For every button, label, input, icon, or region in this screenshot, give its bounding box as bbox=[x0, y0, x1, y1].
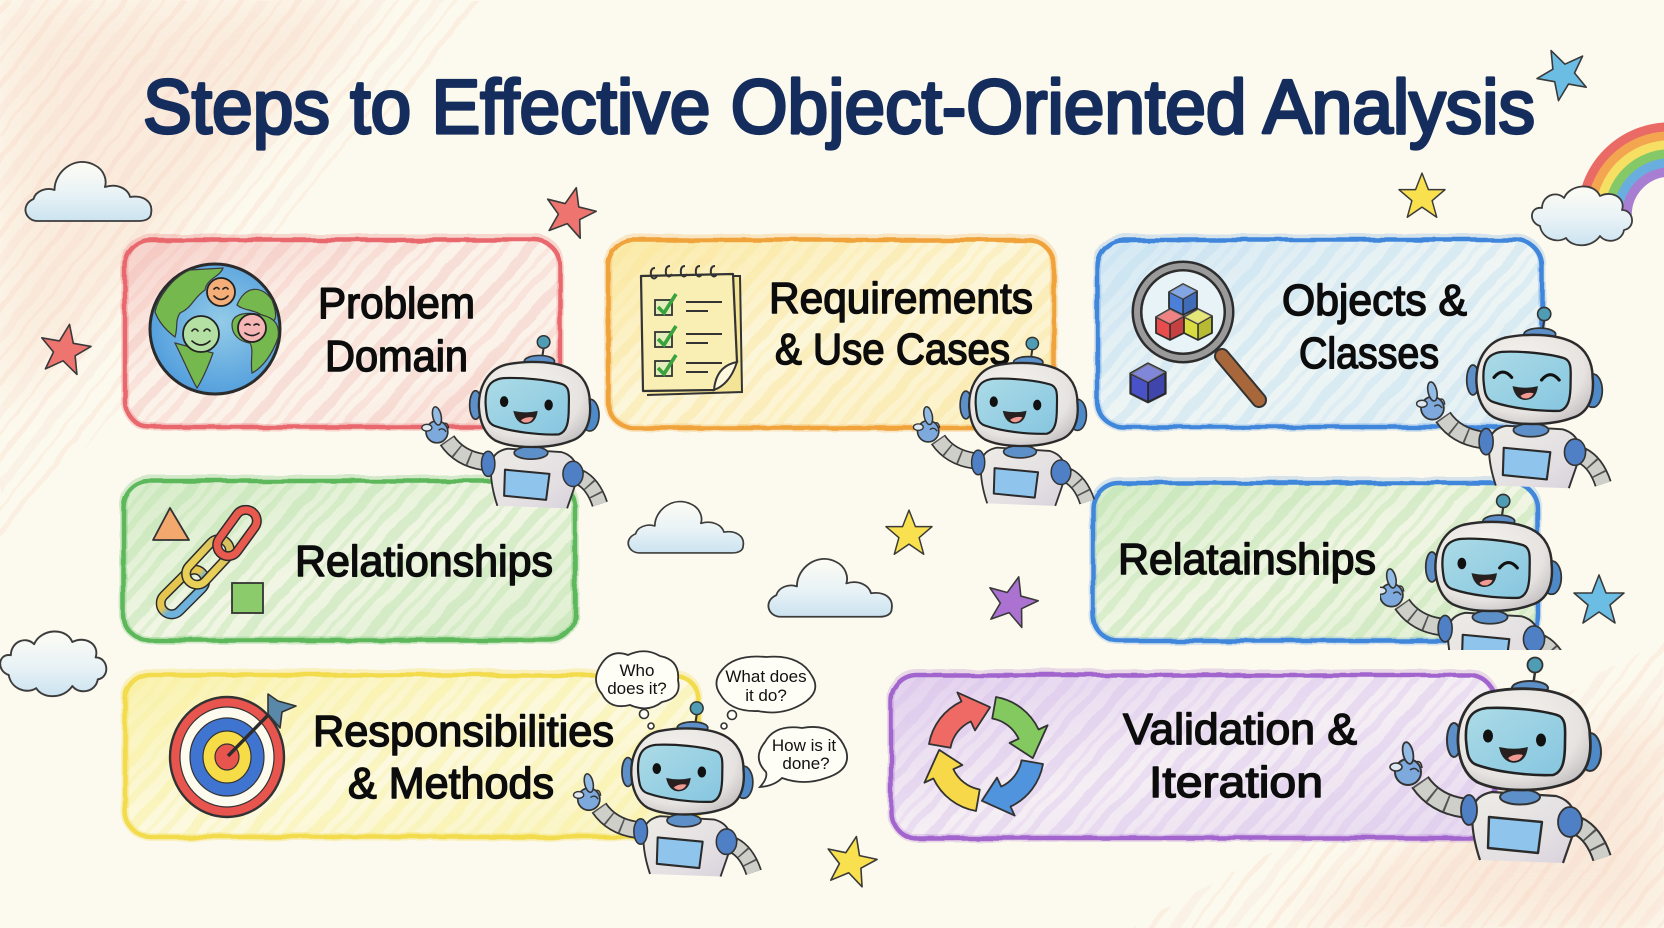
heading: objects and classes: Objects & bbox=[1282, 276, 1467, 325]
panel box bbox=[608, 238, 1054, 428]
cloud: left edge bbox=[0, 631, 106, 696]
heading: responsibilities and methods: & Methods bbox=[348, 759, 554, 808]
heading: problem domain: Domain bbox=[325, 332, 468, 381]
speech bubble: what does it do bbox=[716, 657, 815, 729]
icon: cycle arrows bbox=[924, 692, 1048, 816]
panel box bbox=[891, 673, 1495, 838]
speech bubble: how is it done bbox=[759, 727, 847, 787]
robot: validation bbox=[1390, 658, 1602, 863]
heading: problem domain bbox=[318, 279, 475, 381]
panel: requirements and use cases bbox=[608, 238, 1054, 428]
star: purple centre bbox=[982, 570, 1043, 630]
heading: validation and iteration: Iteration bbox=[1149, 758, 1323, 807]
heading: requirements and use cases bbox=[769, 274, 1033, 374]
background pencil hatching: bottom-right corner bbox=[1130, 640, 1664, 928]
panel: relationships (blue outline) bbox=[1093, 481, 1538, 641]
cloud: centre lower bbox=[768, 559, 892, 617]
cloud: centre upper bbox=[628, 502, 743, 553]
speech bubble: who does it: Who bbox=[620, 661, 654, 680]
panel box bbox=[125, 238, 560, 427]
panel box bbox=[125, 673, 699, 837]
icon: target with arrow bbox=[170, 694, 296, 817]
heading: requirements and use cases: & Use Cases bbox=[775, 325, 1010, 374]
star: red upper bbox=[540, 182, 601, 240]
panel: relationships (green) bbox=[123, 479, 575, 640]
speech bubble: who does it: does it? bbox=[607, 679, 667, 698]
panel: responsibilities and methods bbox=[125, 673, 699, 837]
star: blue top right bbox=[1534, 49, 1591, 105]
heading: responsibilities and methods bbox=[313, 707, 614, 808]
icon: magnifier with cubes bbox=[1130, 266, 1259, 402]
panel box bbox=[1097, 238, 1542, 427]
speech bubble: how is it done: done? bbox=[782, 754, 830, 773]
panel: problem domain bbox=[125, 238, 560, 427]
icon: checklist notepad bbox=[641, 266, 742, 395]
heading: responsibilities and methods: Responsibilities bbox=[313, 707, 614, 756]
heading: relationships: Relationships bbox=[295, 537, 553, 586]
robot: objects, happy eyes bbox=[1417, 307, 1603, 488]
heading: requirements and use cases: Requirements bbox=[769, 274, 1033, 323]
panel: objects and classes bbox=[1097, 238, 1542, 427]
robot: problem domain bbox=[422, 336, 600, 508]
robot: responsibilities bbox=[574, 702, 754, 877]
panel box bbox=[123, 479, 575, 640]
icon: chain with shapes bbox=[153, 505, 263, 619]
speech bubble: who does it bbox=[596, 651, 679, 729]
star: yellow centre bbox=[886, 510, 932, 554]
speech bubble: how is it done: How is it bbox=[772, 736, 836, 755]
robot: requirements bbox=[913, 337, 1087, 506]
heading: validation and iteration bbox=[1123, 705, 1357, 807]
panel: validation and iteration bbox=[891, 673, 1495, 838]
title: Steps to Effective Object-Oriented Analysis bbox=[143, 65, 1535, 150]
star: blue right bbox=[1574, 575, 1624, 623]
star: yellow upper right bbox=[1399, 173, 1445, 217]
heading: problem domain: Problem bbox=[318, 279, 475, 328]
icon: globe with faces bbox=[150, 264, 280, 394]
heading: validation and iteration: Validation & bbox=[1123, 705, 1357, 754]
cloud: upper left bbox=[25, 162, 151, 221]
background pencil hatching: top-left corner bbox=[0, 0, 490, 540]
speech bubble: what does it do: What does bbox=[725, 667, 807, 686]
heading: objects and classes: Classes bbox=[1299, 329, 1439, 378]
panel box bbox=[1093, 481, 1538, 641]
star: yellow bottom bbox=[822, 831, 881, 889]
star: red left bbox=[37, 320, 94, 376]
robot: relationships, winking bbox=[1380, 494, 1562, 650]
heading: objects and classes bbox=[1282, 276, 1467, 378]
rainbow with cloud bbox=[1532, 127, 1664, 245]
heading: garbled relationships: Relatainships bbox=[1118, 535, 1376, 584]
speech bubble: what does it do: it do? bbox=[745, 686, 787, 705]
